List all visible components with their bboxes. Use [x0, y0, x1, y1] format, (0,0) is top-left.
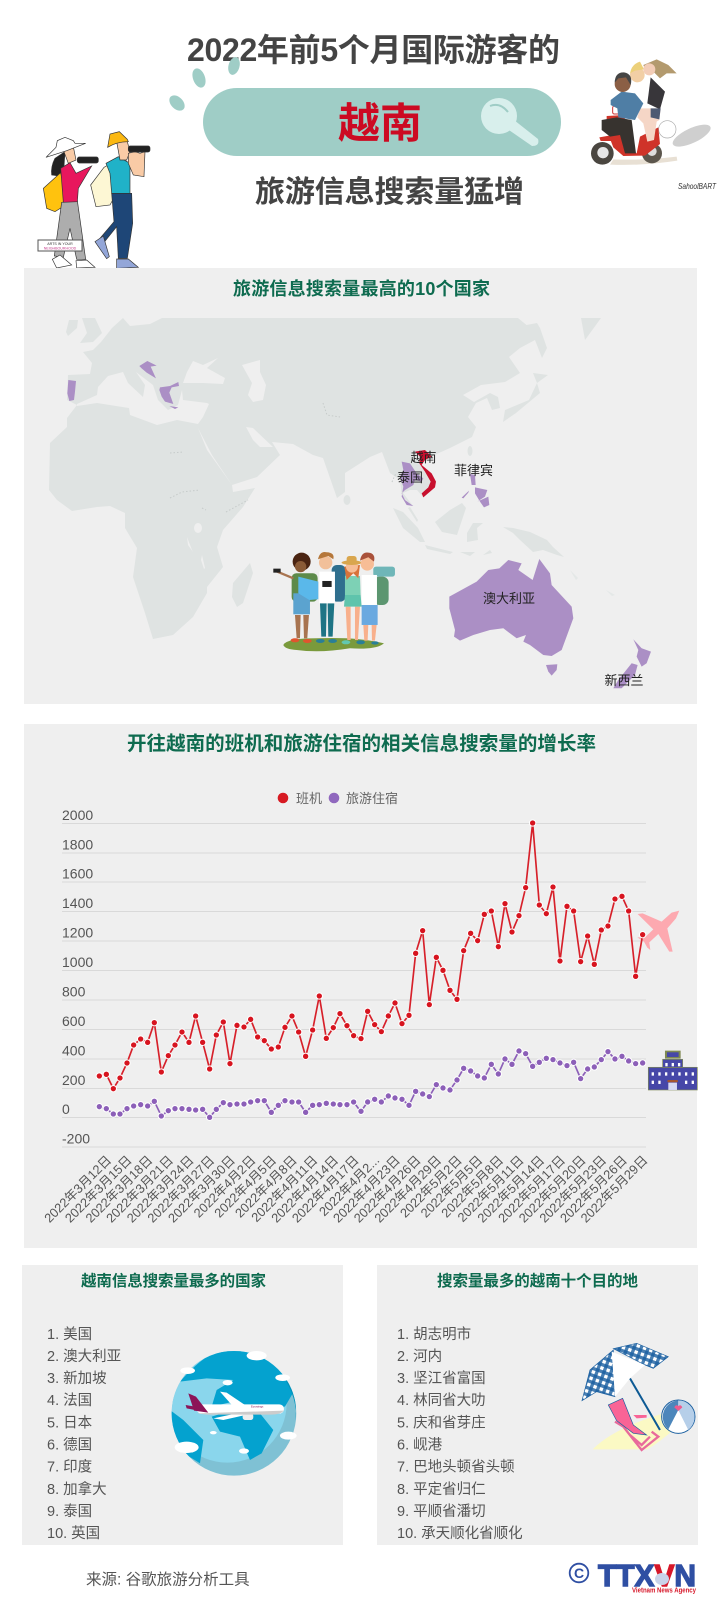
x axis date labels: 2022年3月30日	[165, 1153, 238, 1226]
chart legend	[278, 791, 398, 806]
ranked countries list: 1. 美国	[47, 1326, 92, 1343]
data series: accommodation (purple)	[96, 1048, 646, 1120]
ranked destinations list: 8. 平定省归仁	[397, 1481, 486, 1498]
map label: Thailand: 泰国	[397, 470, 423, 485]
ranked countries list: 4. 法国	[47, 1392, 92, 1409]
x axis date labels: 2022年4月5日	[211, 1153, 279, 1220]
ranked destinations list: 3. 坚江省富国	[397, 1369, 486, 1387]
highlighted countries: Portugal, Croatia, Greece	[67, 361, 179, 409]
x axis date labels: 2022年3月15日	[62, 1153, 135, 1226]
small sign: neighbourhood logo	[38, 240, 82, 251]
ranked countries list: 2. 澳大利亚	[47, 1348, 121, 1365]
x axis date labels: 2022年4月2...	[316, 1153, 382, 1219]
ranked countries list: 8. 加拿大	[47, 1480, 107, 1498]
ranked countries list: 6. 德国	[47, 1436, 92, 1454]
illustration: four backpackers	[273, 552, 395, 651]
y axis labels: 1400	[62, 895, 93, 911]
highlighted country name: 越南	[338, 100, 422, 147]
x axis date labels	[41, 1153, 651, 1226]
x axis date labels: 2022年5月2日	[397, 1153, 465, 1220]
x axis date labels: 2022年5月8日	[438, 1153, 506, 1220]
x axis date labels: 2022年5月26日	[557, 1153, 630, 1226]
heading: destinations list: 搜索量最多的越南十个目的地	[437, 1271, 638, 1290]
x axis date labels: 2022年4月8日	[232, 1153, 300, 1220]
x axis date labels: 2022年4月17日	[289, 1153, 362, 1226]
ranked countries list: 5. 日本	[47, 1414, 92, 1432]
y axis labels: 1000	[62, 954, 93, 970]
y axis labels: 1200	[62, 924, 93, 940]
source note: 来源: 谷歌旅游分析工具	[86, 1570, 250, 1588]
ranked destinations list: 7. 巴地头顿省头顿	[397, 1458, 515, 1476]
y axis labels: 2000	[62, 807, 93, 823]
panel: top 10 source countries map	[24, 268, 697, 704]
x axis date labels: 2022年5月29日	[578, 1153, 651, 1226]
icon: plane	[637, 911, 679, 952]
illustration: globe with airliner	[168, 1344, 297, 1476]
small sign: neighbourhood logo: ARTS IN YOUR	[47, 242, 73, 246]
ranked destinations list: 2. 河内	[397, 1348, 442, 1365]
x axis date labels: 2022年5月14日	[474, 1153, 547, 1226]
ranked countries list: 7. 印度	[47, 1458, 92, 1476]
small sign: neighbourhood logo: NEIGHBOURHOOD	[44, 246, 77, 250]
data series: flights (red)	[96, 820, 646, 1092]
x axis date labels: 2022年3月27日	[144, 1153, 217, 1226]
chart legend: 旅游住宿	[346, 791, 398, 806]
x axis date labels: 2022年4月11日	[248, 1153, 320, 1225]
illustration: globe with airliner: Eurowings	[251, 1405, 264, 1409]
heading: map panel: 旅游信息搜索量最高的10个国家	[233, 278, 490, 299]
x axis date labels: 2022年5月5日	[417, 1153, 485, 1220]
heading: countries list: 越南信息搜索量最多的国家	[81, 1271, 266, 1290]
x axis date labels: 2022年4月2日	[191, 1153, 259, 1220]
chart legend: 班机	[296, 791, 322, 806]
y axis labels: 1600	[62, 866, 93, 882]
illustration: two tourists with binoculars	[43, 132, 150, 268]
x axis date labels: 2022年5月11日	[454, 1153, 527, 1225]
x axis date labels: 2022年3月24日	[124, 1153, 197, 1226]
search bar droplets	[166, 56, 242, 114]
map label: Australia: 澳大利亚	[483, 591, 535, 606]
x axis date labels: 2022年4月29日	[371, 1153, 444, 1226]
map label: Philippines: 菲律宾	[454, 463, 493, 478]
ranked destinations list: 6. 岘港	[397, 1436, 443, 1454]
y axis labels: 400	[62, 1042, 86, 1058]
panel: growth line chart	[24, 724, 697, 1248]
ranked destinations list: 5. 庆和省芽庄	[397, 1414, 486, 1432]
x axis date labels: 2022年4月26日	[351, 1153, 424, 1226]
y axis labels: 800	[62, 984, 86, 1000]
panel: top Vietnam destinations	[377, 1265, 698, 1545]
ranked destinations list	[397, 1326, 523, 1542]
subtitle: 旅游信息搜索量猛增	[255, 176, 524, 209]
title: first line: 2022年前5个月国际游客的	[187, 32, 560, 68]
highlighted countries: Thailand, Philippines, Australia, New Zealand, Vietnam	[400, 450, 651, 688]
illustration: beach umbrella, chair and ball	[582, 1343, 695, 1450]
y axis labels: 0	[62, 1101, 70, 1117]
map label: Vietnam: 越南	[410, 450, 437, 465]
TTXVN wordmark: TTXVN	[598, 1558, 696, 1593]
world map land masses	[49, 318, 615, 639]
illustration: three people on a red scooter	[591, 59, 713, 165]
ranked destinations list: 4. 林同省大叻	[397, 1392, 486, 1409]
ranked countries list: 10. 英国	[47, 1524, 100, 1542]
x axis date labels: 2022年3月18日	[82, 1153, 155, 1226]
y axis labels: 200	[62, 1072, 86, 1088]
ranked destinations list: 9. 平顺省潘切	[397, 1503, 486, 1520]
copyright symbol: C	[574, 1565, 584, 1581]
ranked countries list: 9. 泰国	[47, 1503, 92, 1520]
map label: New Zealand: 新西兰	[604, 673, 644, 688]
x axis date labels: 2022年5月23日	[536, 1153, 609, 1226]
x axis date labels: 2022年3月21日	[103, 1153, 176, 1226]
x axis date labels: 2022年5月17日	[495, 1153, 568, 1226]
x axis date labels: 2022年4月23日	[330, 1153, 403, 1226]
heading: chart panel: 开往越南的班机和旅游住宿的相关信息搜索量的增长率	[127, 732, 596, 755]
y axis labels	[62, 807, 93, 1146]
search bar with country name	[203, 88, 561, 156]
y axis labels: 600	[62, 1013, 86, 1029]
x axis date labels: 2022年5月20日	[516, 1153, 589, 1226]
x axis date labels: 2022年3月12日	[41, 1153, 114, 1226]
y axis labels: -200	[62, 1130, 90, 1146]
agency name: Vietnam News Agency	[632, 1586, 697, 1594]
ranked countries list	[47, 1326, 121, 1542]
ranked destinations list: 1. 胡志明市	[397, 1326, 471, 1343]
logo: TTXVN Vietnam News Agency	[570, 1558, 697, 1594]
y axis labels: 1800	[62, 836, 93, 852]
ranked destinations list: 10. 承天顺化省顺化	[397, 1525, 523, 1542]
ranked countries list: 3. 新加坡	[47, 1370, 107, 1387]
x axis date labels: 2022年4月14日	[268, 1153, 341, 1226]
icon: hotel	[648, 1051, 697, 1090]
icon: magnifying glass	[481, 98, 538, 146]
panel: top countries searching Vietnam	[22, 1265, 343, 1545]
